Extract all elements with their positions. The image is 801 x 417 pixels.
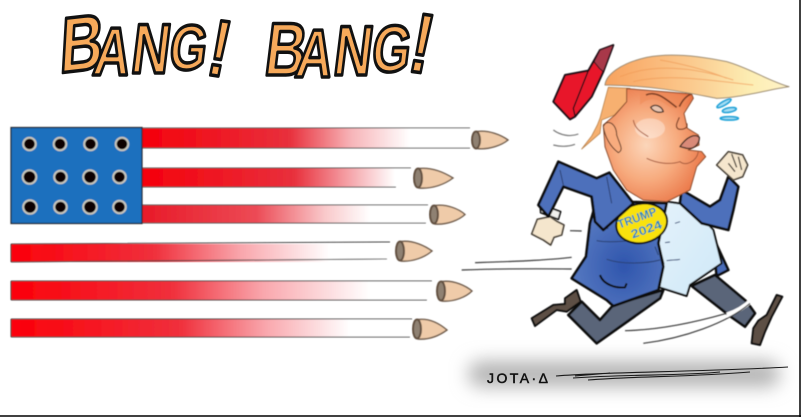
- side hair: [582, 87, 630, 149]
- cap motion lines: [553, 130, 578, 146]
- bullet 5: [437, 281, 472, 301]
- stripe 2: [142, 168, 412, 187]
- nose: [676, 117, 687, 129]
- speed lines: [462, 231, 750, 343]
- hair strands: [620, 60, 753, 85]
- flag of bullet trails: [11, 128, 508, 339]
- running figure: [462, 45, 789, 345]
- title word 2: A: [292, 15, 338, 92]
- right arm: [680, 177, 738, 230]
- hair: [605, 55, 789, 98]
- sweat drops: [716, 98, 738, 120]
- white gap across leg: [727, 300, 752, 315]
- bullet 6: [413, 319, 447, 339]
- front leg: [692, 275, 755, 327]
- signature: JOTA·Δ: [487, 370, 548, 386]
- stripe 4: [11, 242, 391, 262]
- bullet 1: [472, 131, 508, 149]
- eye: [651, 105, 663, 112]
- ear: [603, 123, 621, 153]
- bullet 4: [396, 241, 432, 261]
- button text: TRUMP: [616, 204, 659, 231]
- title word 1: A: [90, 13, 136, 90]
- shadow: [468, 361, 780, 387]
- left cuff: [540, 204, 561, 219]
- jacket body: [572, 200, 667, 306]
- upper body, zoom coordinates: [538, 45, 789, 230]
- right fist: [717, 152, 748, 180]
- ground lines: [556, 367, 788, 380]
- jacket folds: [597, 222, 680, 263]
- bullet 2: [414, 168, 453, 188]
- mouth: [680, 136, 699, 148]
- title word 1: N: [128, 11, 175, 89]
- title word 2: B: [261, 8, 311, 92]
- back leg: [568, 290, 663, 343]
- button text: 2024: [629, 217, 664, 241]
- stripe 1: [142, 128, 470, 148]
- title: BANG! BANG!: [52, 0, 442, 94]
- bullet holes: [23, 138, 128, 214]
- stripe 6: [11, 319, 412, 337]
- lower body, zoom coordinates: [462, 199, 782, 345]
- title word 2: G: [368, 13, 415, 86]
- left arm: [538, 162, 633, 230]
- forehead shading: [640, 92, 690, 108]
- fist fingers: [728, 154, 742, 172]
- brow: [646, 94, 692, 107]
- title word 1: !: [201, 2, 239, 94]
- title word 1: G: [166, 12, 212, 83]
- back shoe: [532, 290, 581, 326]
- front shoe: [752, 295, 782, 345]
- flying red cap: [553, 45, 613, 119]
- shirt: [658, 202, 722, 296]
- ground shadow with signature: [468, 361, 788, 387]
- campaign button: [612, 199, 671, 248]
- cheek highlight: [635, 118, 665, 138]
- stripe 3: [142, 205, 428, 223]
- blue canton with bullet holes: [11, 128, 142, 224]
- jacket pocket: [600, 275, 627, 288]
- stripe 5: [11, 281, 433, 300]
- face: [603, 89, 706, 202]
- bullet 3: [430, 205, 465, 224]
- chin line: [633, 120, 698, 164]
- title word 2: N: [330, 13, 377, 91]
- jacket right flap: [707, 223, 728, 276]
- left fist: [532, 217, 564, 245]
